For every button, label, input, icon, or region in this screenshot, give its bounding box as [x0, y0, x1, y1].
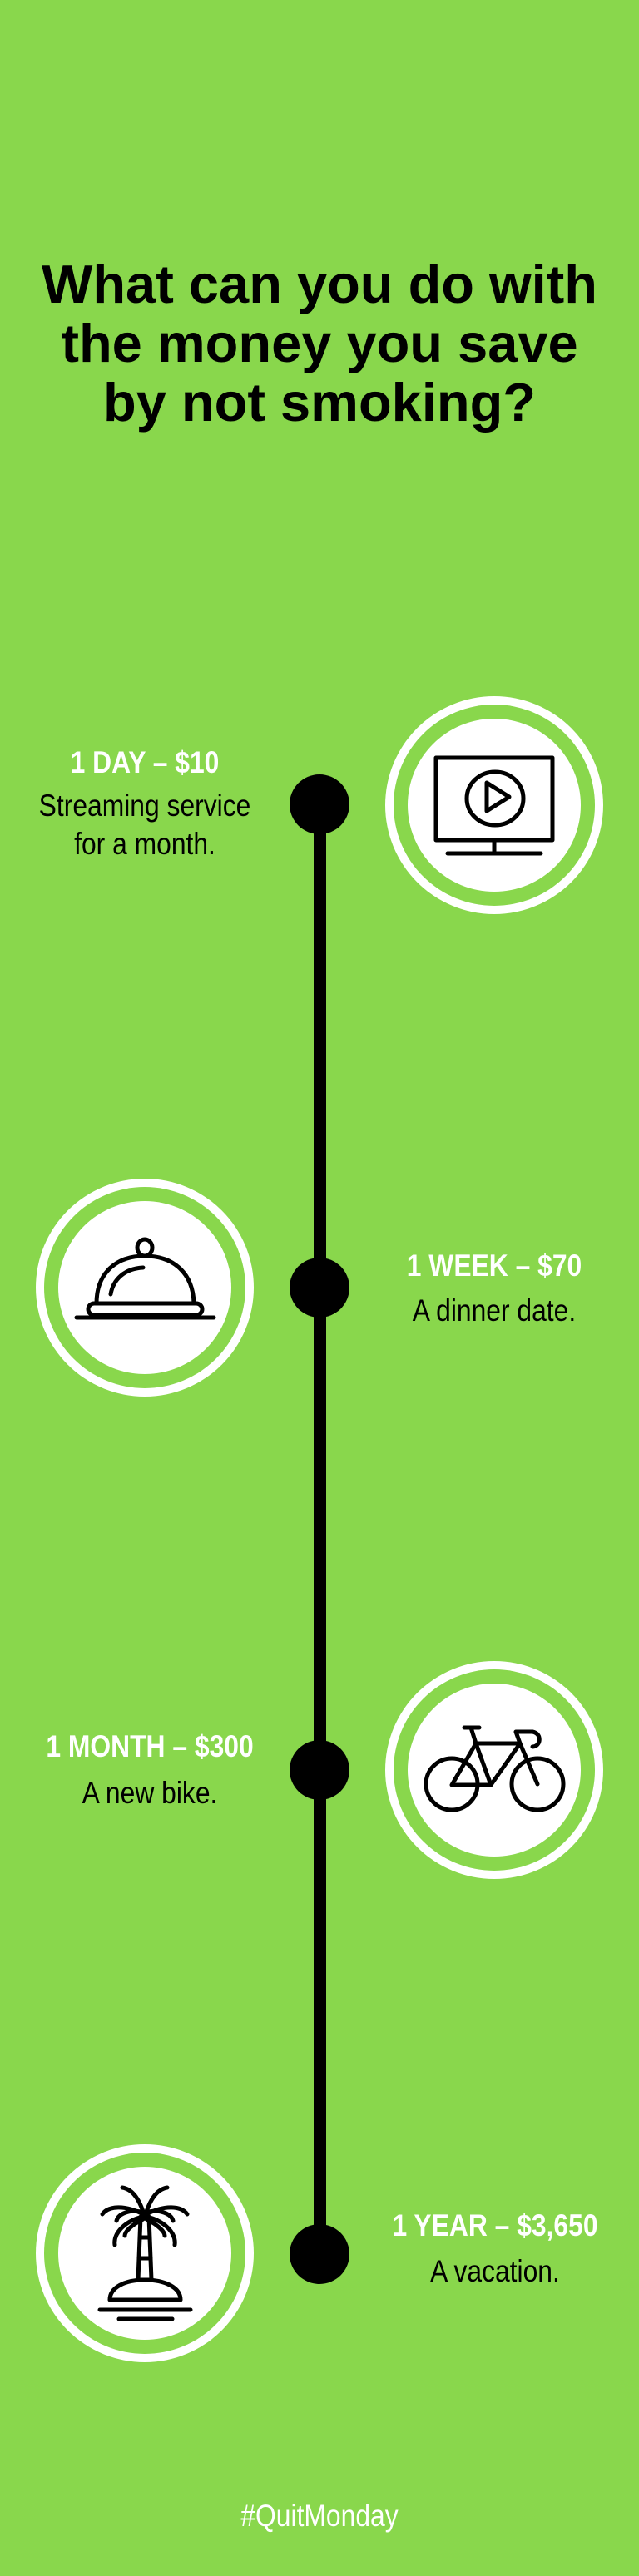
- title: What can you do with: [42, 254, 597, 314]
- timeline dot 1: [290, 774, 349, 834]
- title: [42, 254, 597, 433]
- text: 1 month: [46, 1729, 254, 1810]
- text: 1 day: for a month.: [74, 827, 215, 861]
- icon: streaming TV: [385, 696, 603, 914]
- text: 1 day: Streaming service: [39, 789, 250, 823]
- text: 1 year: 1 YEAR – $3,650: [392, 2208, 598, 2242]
- text: 1 week: 1 WEEK – $70: [407, 1248, 582, 1283]
- timeline line: [314, 804, 326, 2254]
- text: 1 month: 1 MONTH – $300: [46, 1729, 254, 1763]
- footer hashtag: #QuitMonday: [240, 2499, 399, 2533]
- icon: palm island: [36, 2144, 254, 2362]
- title: by not smoking?: [103, 372, 536, 433]
- text: 1 day: [39, 745, 250, 861]
- text: 1 month: A new bike.: [82, 1776, 217, 1810]
- text: 1 week: [407, 1248, 582, 1328]
- timeline dot 4: [290, 2224, 349, 2284]
- text: 1 day: 1 DAY – $10: [71, 745, 219, 779]
- title: the money you save: [61, 313, 578, 373]
- timeline dot 2: [290, 1258, 349, 1318]
- text: 1 year: A vacation.: [430, 2254, 560, 2288]
- text: 1 week: A dinner date.: [413, 1293, 576, 1328]
- icon: bike: [385, 1661, 603, 1879]
- timeline dot 3: [290, 1740, 349, 1800]
- icon: dinner cloche: [36, 1179, 254, 1397]
- text: 1 year: [392, 2208, 598, 2288]
